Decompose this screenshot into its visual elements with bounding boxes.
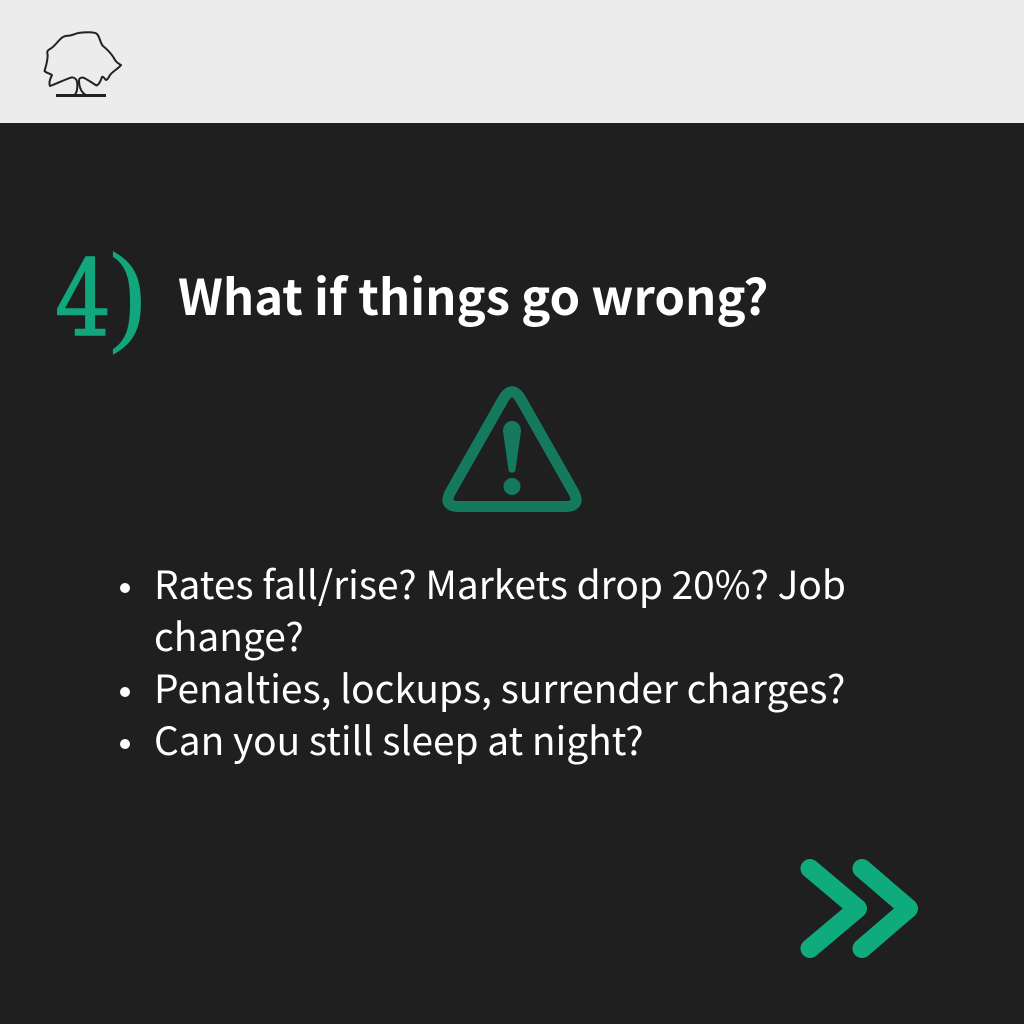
bullet list: [120, 555, 846, 767]
bullet: rates and markets: Rates fall/rise? Markets drop 20%? Job: [154, 555, 846, 611]
number: 4): 4: [55, 238, 111, 360]
bullet: penalties: Penalties, lockups, surrender charges?: [154, 659, 845, 715]
icon: warning triangle: [442, 386, 582, 512]
icon: double chevron arrow: [800, 859, 918, 958]
bullet: sleep: Can you still sleep at night?: [154, 711, 644, 767]
bullet: rates and markets: [120, 555, 846, 663]
number: 4): ): [110, 231, 145, 355]
number: 4): [55, 231, 145, 360]
bullet: rates and markets: change?: [154, 607, 304, 663]
header band: [0, 0, 1024, 123]
icon: tree logo: [44, 31, 122, 97]
title: What if things go wrong?: [178, 259, 768, 330]
